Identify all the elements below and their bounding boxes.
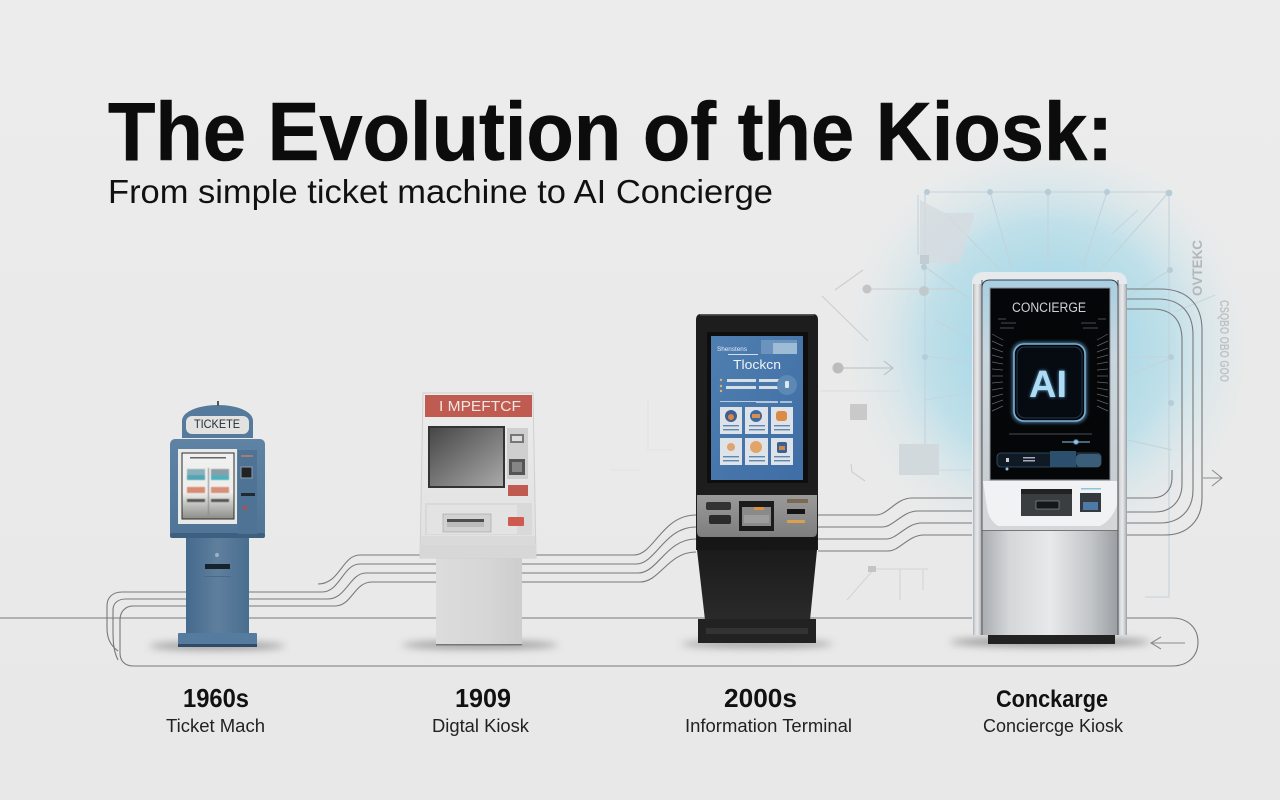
label: 1909 bbox=[432, 683, 530, 736]
AI icon box bbox=[1012, 342, 1087, 423]
AI text: AI bbox=[1029, 364, 1067, 406]
body bbox=[696, 314, 818, 550]
screen small heading: Shenstens bbox=[717, 347, 747, 353]
steel lower cabinet bbox=[982, 530, 1118, 635]
shadows under kiosks bbox=[149, 637, 1150, 650]
base bbox=[988, 634, 1115, 644]
label: 2000s bbox=[685, 683, 852, 736]
header text: I MPEFTCF bbox=[439, 399, 521, 415]
label: 1909: 1909 bbox=[455, 683, 511, 713]
kiosk 4: AI concierge bbox=[972, 272, 1127, 644]
side panel bbox=[238, 450, 257, 534]
AI glow text: AI bbox=[1029, 364, 1067, 406]
red button bbox=[508, 517, 524, 526]
tray bbox=[425, 503, 532, 535]
tech network backdrop bbox=[918, 189, 1215, 597]
arrow heads bbox=[1203, 470, 1222, 486]
faint schematic lines left of AI kiosk bbox=[610, 270, 955, 600]
speed lines bbox=[992, 319, 1108, 434]
pedestal bbox=[697, 550, 817, 620]
sign top bbox=[182, 405, 253, 438]
subtitle: From simple ticket machine to AI Concierge bbox=[108, 173, 773, 210]
card reader bbox=[1021, 489, 1072, 516]
label: Conckarge: Conciercge Kiosk bbox=[983, 716, 1124, 736]
outer shell bbox=[972, 272, 1127, 635]
blue glow behind AI kiosk bbox=[843, 140, 1253, 550]
kiosk 3: information terminal bbox=[696, 314, 818, 643]
label: 1960s bbox=[166, 683, 265, 736]
screen label: CONCIERGE bbox=[1012, 300, 1086, 315]
wires wrapping right of kiosk 4 bbox=[1127, 289, 1202, 535]
timeline connector wires bbox=[0, 289, 1222, 666]
label: Conckarge bbox=[983, 686, 1124, 736]
label: 2000s: 2000s bbox=[724, 683, 797, 713]
red header band bbox=[425, 395, 532, 417]
sign text: TICKETE bbox=[194, 417, 240, 431]
label: 2000s: Information Terminal bbox=[685, 716, 852, 736]
black screen bbox=[990, 288, 1110, 480]
kiosk 1: ticket machine bbox=[170, 401, 265, 647]
grey control panel bbox=[697, 495, 817, 537]
column bbox=[186, 538, 249, 634]
screen bezel bbox=[707, 332, 808, 483]
kiosk 2: digital kiosk bbox=[420, 393, 536, 646]
rotated side label: CSQBO OBO GOO: CSQBO OBO GOO bbox=[1217, 300, 1232, 382]
label: 1960s: 1960s bbox=[183, 683, 249, 713]
white control band bbox=[983, 481, 1117, 526]
side controls bbox=[507, 428, 528, 479]
steel lower band bbox=[982, 481, 1118, 530]
label: Conckarge: Conckarge bbox=[996, 686, 1108, 713]
screen bbox=[429, 427, 504, 487]
baseline and return loop bbox=[0, 552, 1198, 666]
screen big heading: Tlockcn bbox=[733, 358, 781, 372]
body bbox=[420, 393, 536, 558]
rotated side label: OVTEKC: OVTEKC bbox=[1189, 240, 1205, 296]
ticket cards bbox=[187, 468, 229, 515]
lip bbox=[421, 536, 535, 545]
blue screen bbox=[711, 336, 803, 480]
sparkle bbox=[1006, 440, 1090, 470]
wires between kiosk 3 and kiosk 4 bbox=[818, 498, 972, 551]
screen frame bbox=[178, 449, 237, 524]
screen rows bbox=[720, 379, 792, 403]
title: The Evolution of the Kiosk: bbox=[108, 85, 1113, 178]
upper wires bbox=[107, 527, 696, 651]
menu bar bbox=[997, 453, 1101, 467]
column bbox=[436, 556, 522, 645]
payment slot bbox=[1080, 493, 1101, 512]
label: 1909: Digtal Kiosk bbox=[432, 716, 530, 736]
head bbox=[170, 439, 265, 538]
screen cards bbox=[720, 407, 793, 465]
base bbox=[698, 619, 816, 643]
label: 1960s: Ticket Mach bbox=[166, 716, 265, 736]
base bbox=[178, 633, 257, 647]
inner frame bbox=[982, 280, 1118, 530]
